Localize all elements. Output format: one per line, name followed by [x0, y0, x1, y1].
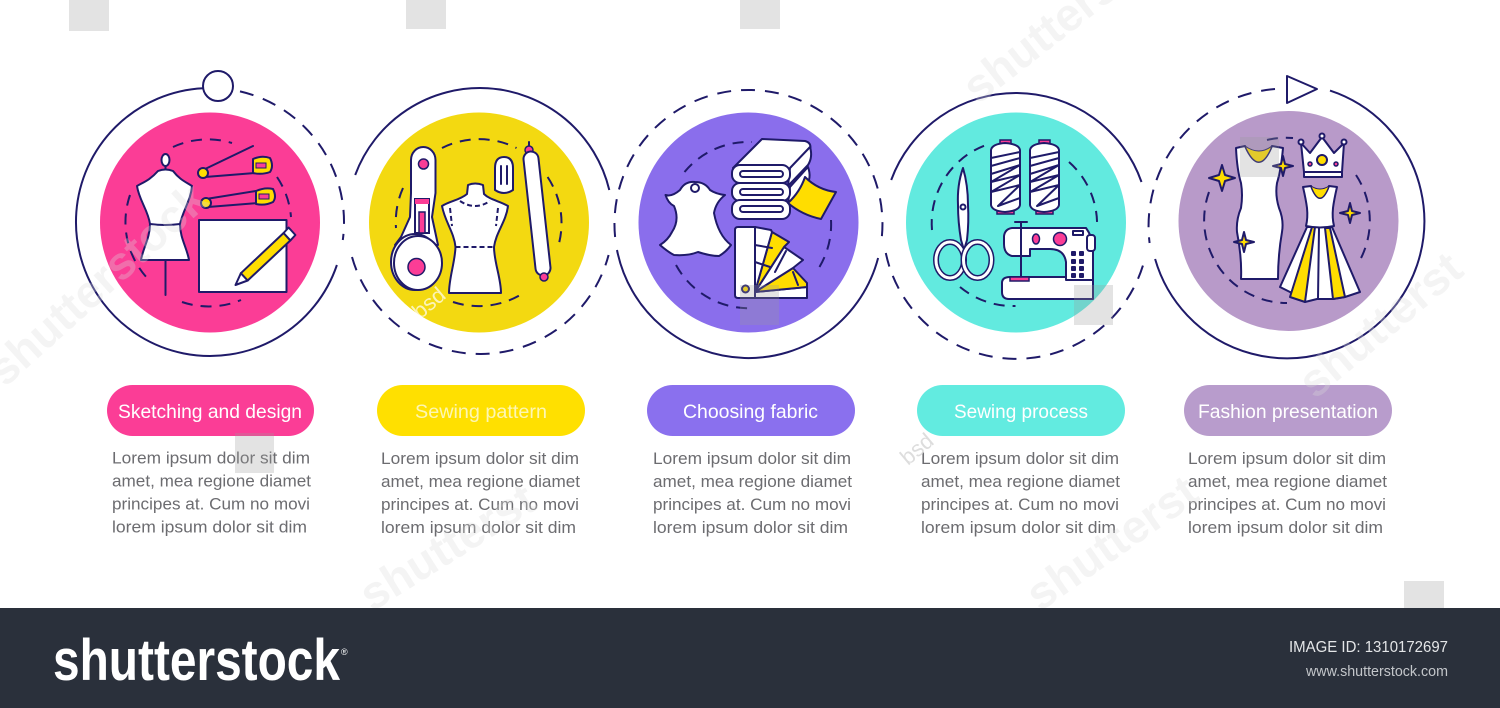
step 4 description: principes at. Cum no movi: [921, 495, 1119, 514]
step 2 description: Lorem ipsum dolor sit dim: [381, 449, 579, 468]
inner dashed ring: [125, 139, 291, 306]
panel: sketching and design: [76, 71, 344, 356]
icon: rotary cutter: [391, 147, 442, 290]
panel: fashion presentation: [1149, 76, 1424, 358]
icon: safety pin top: [198, 146, 272, 178]
start marker: [203, 71, 233, 101]
outer ring solid arc: [891, 93, 1142, 182]
icon: chalk marker: [525, 142, 548, 281]
outer ring dashed arc: [240, 91, 344, 240]
step 1 description: principes at. Cum no movi: [112, 494, 310, 514]
footer logo: shutterstock: [53, 628, 341, 693]
step 4 label: [917, 385, 1125, 436]
step 5 description: principes at. Cum no movi: [1188, 495, 1386, 514]
inner dashed ring: [676, 142, 831, 308]
panel: choosing fabric: [614, 90, 882, 358]
outer ring solid arc: [76, 88, 337, 356]
step 3 description: lorem ipsum dolor sit dim: [653, 518, 848, 537]
step circle fill: [1178, 111, 1398, 331]
watermark overlay: bsd: [895, 428, 938, 470]
step 2 description: principes at. Cum no movi: [381, 495, 579, 514]
step circle fill: [638, 112, 858, 332]
inner dashed ring: [1204, 138, 1370, 303]
step 2 description: lorem ipsum dolor sit dim: [381, 518, 576, 537]
outer ring dashed arc: [1149, 89, 1275, 243]
step 3 description: [653, 449, 852, 537]
step circle fill: [369, 112, 589, 332]
icon: fitted dress: [1236, 146, 1283, 279]
step 4 description: Lorem ipsum dolor sit dim: [921, 449, 1119, 468]
image id: IMAGE ID: 1310172697: [1289, 639, 1448, 656]
icon: safety pin bottom: [201, 188, 275, 208]
icon: thread spool right: [1030, 140, 1059, 214]
step 1 description: Lorem ipsum dolor sit dim: [112, 448, 310, 468]
step 1 description: amet, mea regione diamet: [112, 472, 311, 490]
step 1 description: [112, 448, 311, 536]
step 4 label: Sewing process: [954, 402, 1088, 423]
watermark overlay: bsd: [407, 282, 450, 324]
icon: thimble: [495, 157, 513, 193]
website: www.shutterstock.com: [1305, 664, 1448, 680]
inner dashed ring: [396, 139, 562, 306]
icon: yellow cloth swatch: [788, 177, 836, 219]
step 4 description: lorem ipsum dolor sit dim: [921, 518, 1116, 537]
outer ring solid arc: [617, 250, 878, 358]
step 3 description: amet, mea regione diamet: [653, 472, 852, 491]
panel: sewing pattern: [352, 88, 609, 354]
step 2 label: [377, 385, 585, 436]
icon: colour fan deck: [735, 227, 807, 298]
step 3 label: [647, 385, 855, 436]
icon: leather hide: [660, 182, 731, 256]
panel: sewing process: [886, 93, 1145, 359]
end marker triangle: [1287, 76, 1317, 103]
step 2 label: Sewing pattern: [415, 402, 547, 423]
step circle fill: [906, 112, 1126, 332]
inner dashed ring: [932, 145, 1097, 306]
step 1 label: Sketching and design: [118, 402, 302, 423]
icon: sparkles: [1209, 156, 1360, 252]
outer ring solid arc: [1155, 91, 1424, 358]
icon: sewing machine: [1002, 222, 1095, 299]
watermark overlay: shutterst: [1288, 241, 1472, 408]
step 1 label: [107, 385, 314, 436]
step 3 label: Choosing fabric: [683, 402, 818, 423]
watermark overlay: shutterst: [350, 472, 544, 620]
footer bar: [0, 608, 1500, 708]
step 2 description: amet, mea regione diamet: [381, 472, 580, 491]
outer ring dashed arc: [886, 253, 1145, 359]
step 5 description: lorem ipsum dolor sit dim: [1188, 518, 1383, 537]
registered mark: ®: [341, 647, 348, 657]
outer ring dashed arc: [614, 90, 882, 243]
step 5 label: [1184, 385, 1392, 436]
icon: paper sheet: [199, 220, 286, 292]
icon: dress form: [442, 184, 508, 293]
step 3 description: principes at. Cum no movi: [653, 495, 851, 514]
icon: crown: [1298, 134, 1346, 177]
step 2 description: [381, 449, 580, 537]
watermark overlay: shutterst: [1016, 465, 1207, 620]
step 5 label: Fashion presentation: [1198, 402, 1378, 423]
outer ring dashed arc: [352, 255, 609, 354]
step 1 description: lorem ipsum dolor sit dim: [112, 518, 307, 536]
step 5 description: Lorem ipsum dolor sit dim: [1188, 449, 1386, 468]
icon: flared dress: [1280, 186, 1360, 302]
outer ring solid arc: [355, 88, 609, 190]
step 4 description: amet, mea regione diamet: [921, 472, 1120, 491]
icon: pencil: [236, 228, 295, 285]
step 4 description: [921, 449, 1120, 537]
icon: mannequin: [137, 154, 192, 295]
icon: folded fabric stack: [732, 139, 811, 219]
step 3 description: Lorem ipsum dolor sit dim: [653, 449, 851, 468]
step circle fill: [100, 112, 320, 332]
icon: thread spool left: [991, 140, 1020, 214]
step 5 description: [1188, 449, 1387, 537]
icon: scissors: [936, 168, 992, 278]
step 5 description: amet, mea regione diamet: [1188, 472, 1387, 491]
